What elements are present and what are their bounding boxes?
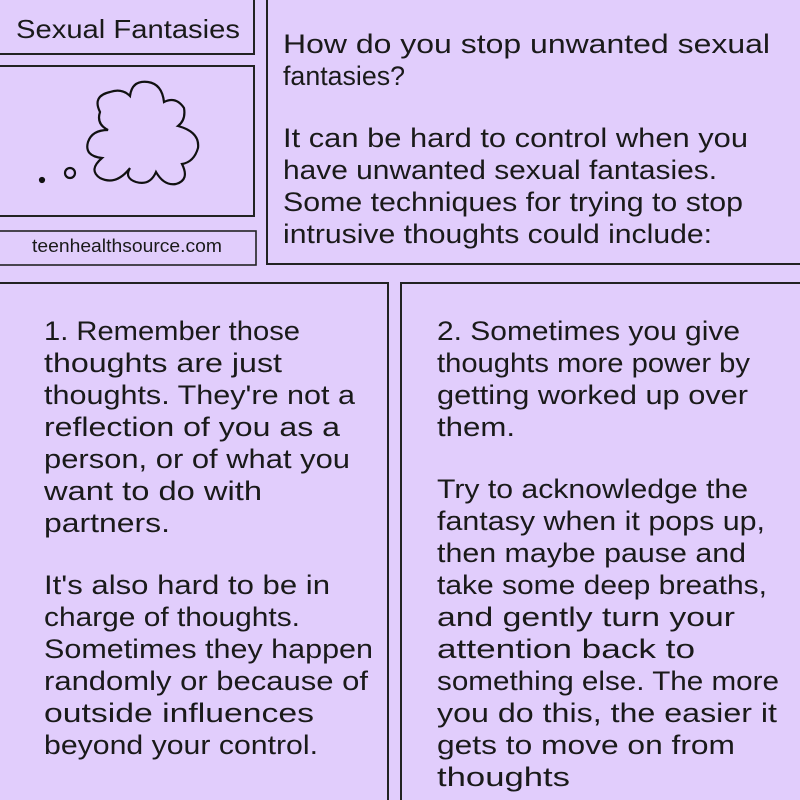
- text block: intro: [283, 29, 770, 249]
- panel: tip 1: [0, 283, 388, 800]
- panel: tip 2: [401, 283, 800, 800]
- text block: tip 2: gets to move on from: [437, 730, 735, 760]
- text block: tip 2: and gently turn your: [437, 602, 735, 632]
- panel: url: [0, 231, 256, 265]
- text block: tip 2: attention back to: [437, 634, 695, 664]
- text block: tip 1: reflection of you as a: [44, 412, 341, 442]
- text block: tip 2: them.: [437, 412, 515, 442]
- text block: tip 1: thoughts are just: [44, 348, 283, 378]
- text block: tip 2: Try to acknowledge the: [437, 474, 748, 504]
- text block: tip 1: Sometimes they happen: [44, 634, 373, 664]
- text block: tip 2: fantasy when it pops up,: [437, 506, 765, 536]
- text block: tip 1: beyond your control.: [44, 730, 318, 760]
- text block: tip 1: charge of thoughts.: [44, 602, 300, 632]
- panel: thought cloud: [0, 66, 254, 216]
- text block: tip 2: thoughts more power by: [437, 348, 751, 378]
- text block: intro: Some techniques for trying to stop: [283, 187, 743, 217]
- text block: tip 1: [43, 316, 373, 760]
- text block: tip 1: randomly or because of: [44, 666, 369, 696]
- panel: intro: [267, 0, 800, 264]
- heading: title: Sexual Fantasies: [16, 14, 240, 44]
- text block: tip 1: thoughts. They're not a: [44, 380, 356, 410]
- text block: tip 2: getting worked up over: [437, 380, 748, 410]
- text block: tip 1: person, or of what you: [44, 444, 350, 474]
- text block: tip 2: thoughts: [437, 762, 570, 792]
- text block: intro: How do you stop unwanted sexual: [283, 29, 770, 59]
- text block: tip 2: you do this, the easier it: [437, 698, 778, 728]
- text block: tip 1: outside influences: [44, 698, 314, 728]
- text block: tip 1: partners.: [44, 508, 170, 538]
- text block: tip 2: then maybe pause and: [437, 538, 746, 568]
- text block: intro: fantasies?: [283, 61, 405, 91]
- text block: intro: have unwanted sexual fantasies.: [283, 155, 717, 185]
- text block: tip 2: [437, 316, 779, 792]
- text: url: teenhealthsource.com: [32, 236, 222, 256]
- text block: tip 1: want to do with: [43, 476, 262, 506]
- text block: intro: It can be hard to control when you: [283, 123, 748, 153]
- text block: tip 1: 1. Remember those: [44, 316, 300, 346]
- icon: thought cloud: [40, 82, 198, 184]
- text block: intro: intrusive thoughts could include:: [283, 219, 712, 249]
- text block: tip 2: 2. Sometimes you give: [437, 316, 740, 346]
- panel: title: [0, 0, 254, 54]
- text block: tip 1: It's also hard to be in: [44, 570, 330, 600]
- text block: tip 2: something else. The more: [437, 666, 779, 696]
- text block: tip 2: take some deep breaths,: [437, 570, 767, 600]
